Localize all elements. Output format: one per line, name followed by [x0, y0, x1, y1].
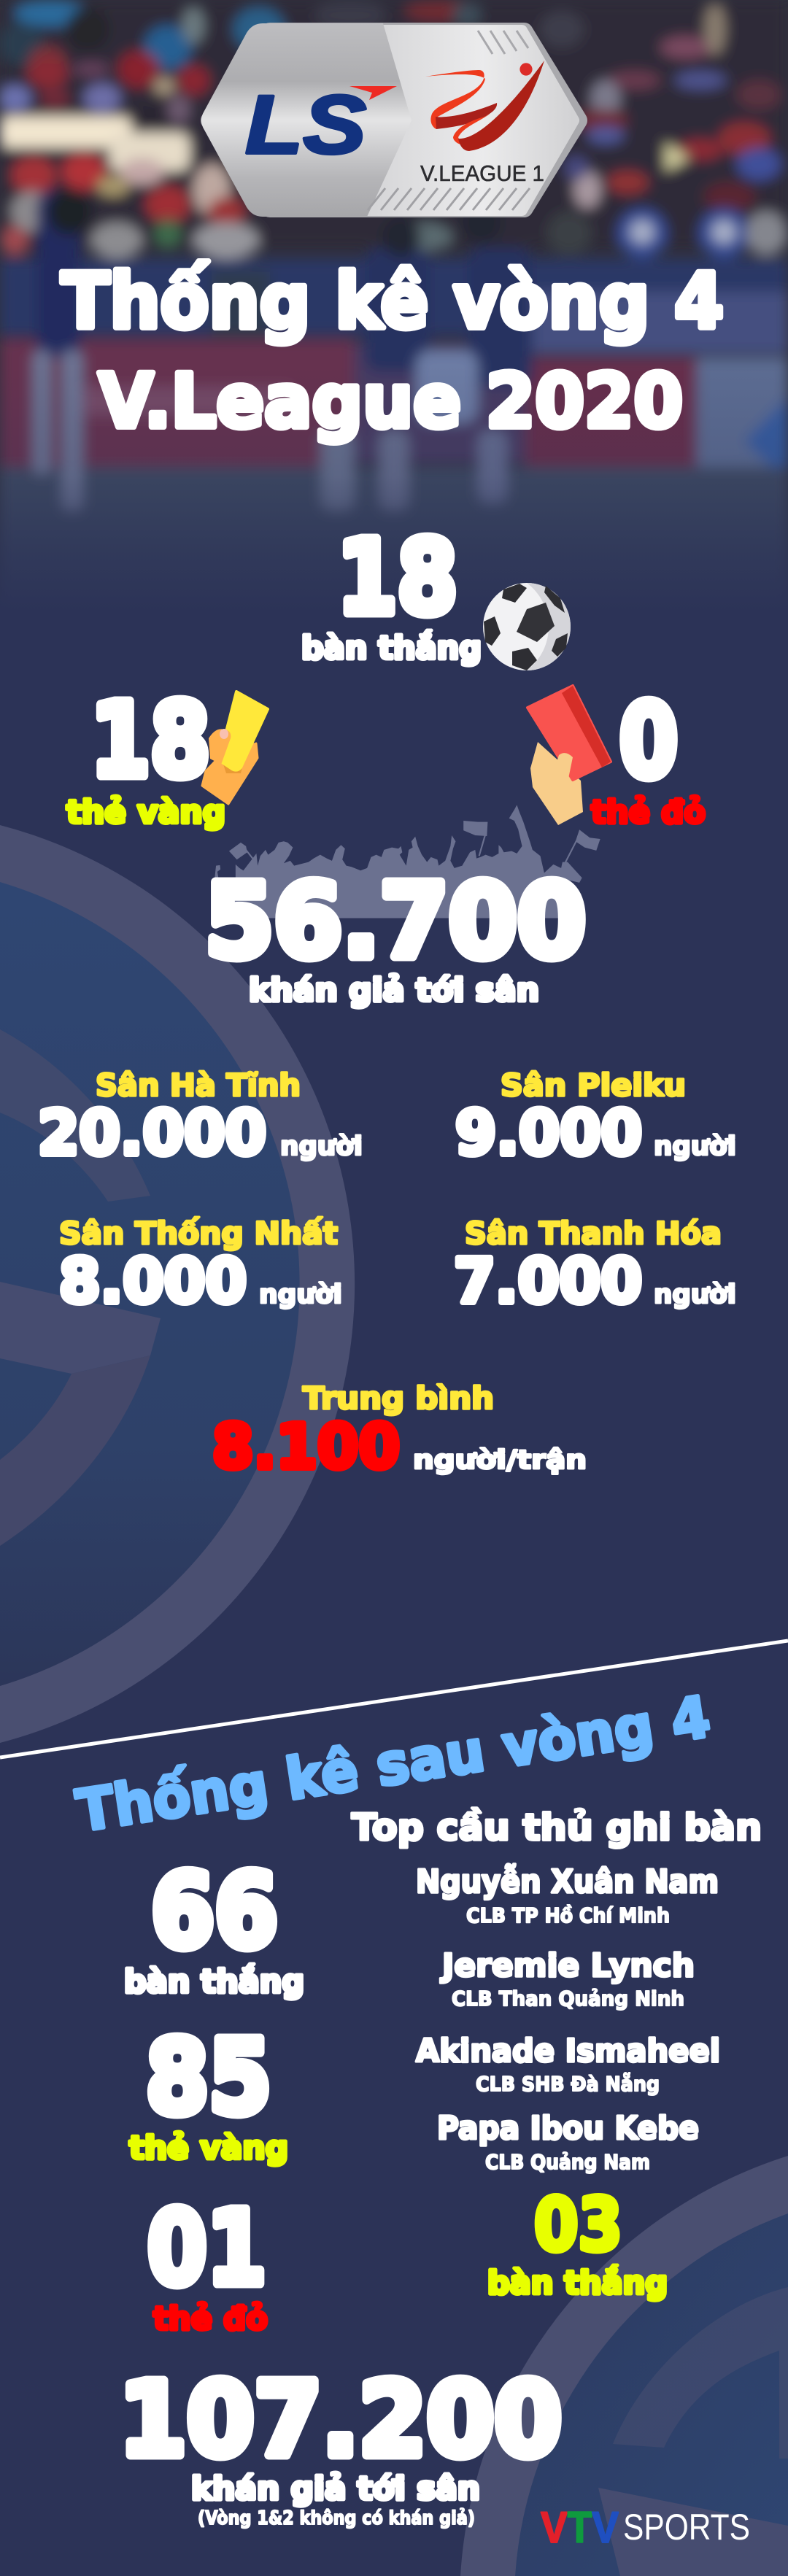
stat: red cards — [591, 682, 706, 831]
player name: Jeremie Lynch — [440, 1947, 695, 1984]
player name: Nguyễn Xuân Nam — [416, 1863, 719, 1900]
logo: VTV Sports — [541, 2503, 750, 2552]
logo mark: VTV: VTV — [541, 2503, 619, 2552]
club: CLB Than Quảng Ninh — [452, 1987, 684, 2011]
logo: V.League 1 label: V.LEAGUE 1 — [420, 160, 544, 186]
stadium name: Sân Pleiku — [501, 1067, 686, 1103]
stadium name: Sân Thanh Hóa — [465, 1215, 722, 1251]
stat: total spectators — [205, 862, 586, 1009]
stat: cumulative yellow cards — [129, 2019, 288, 2167]
stat: cumulative spectators — [119, 2361, 562, 2529]
icon: hand with red card — [528, 686, 611, 825]
player name: Akinade Ismaheel — [416, 2032, 720, 2070]
stadium name: Sân Thống Nhất — [59, 1215, 338, 1251]
background: blurred stadium photo — [0, 0, 788, 613]
logo badge: LS V.League 1 — [201, 23, 578, 217]
club: CLB TP Hồ Chí Minh — [466, 1903, 670, 1927]
icon: small red ball — [519, 63, 533, 76]
label: goals: bàn thắng — [487, 2264, 668, 2302]
background: watermark logo left — [0, 825, 355, 1743]
stat: top scorer goals — [487, 2182, 668, 2302]
unit: người — [654, 1132, 736, 1161]
number: 18 yellow cards: 18 — [90, 681, 210, 800]
icon: V.League ribbon — [425, 61, 544, 151]
number: 66: 66 — [151, 1852, 278, 1971]
background: watermark logo bottom right — [460, 2156, 788, 2576]
scorer: Jeremie Lynch — [440, 1947, 695, 2011]
title line 2: V.League 2020 — [98, 358, 683, 445]
unit: per match: người/trận — [413, 1445, 587, 1475]
label: yellow cards: thẻ vàng — [129, 2130, 288, 2167]
attendance: 20.000 — [38, 1097, 266, 1169]
logo: LS wordmark: LS — [245, 79, 366, 171]
label: red cards: thẻ đỏ — [591, 794, 706, 831]
attendance: 9.000 — [455, 1097, 642, 1169]
number: 107.200: 107.200 — [119, 2361, 562, 2480]
icon: crowd silhouette — [215, 805, 600, 918]
attendance: 7.000 — [454, 1245, 642, 1317]
number: 01: 01 — [147, 2189, 266, 2308]
title line 1: Thống kê vòng 4 — [61, 257, 724, 346]
stadium: Thống Nhất — [59, 1215, 342, 1317]
scorer: Akinade Ismaheel — [416, 2032, 720, 2096]
number: 0 red cards: 0 — [619, 682, 678, 801]
scorer: Nguyễn Xuân Nam — [416, 1863, 719, 1927]
number: 03: 03 — [534, 2182, 622, 2267]
label: goals: bàn thắng — [124, 1963, 304, 2000]
label: spectators: khán giả tới sân — [249, 972, 539, 1009]
club: CLB SHB Đà Nẵng — [476, 2071, 660, 2096]
label: average: Trung bình — [303, 1380, 494, 1416]
heading: stats after round 4: Thống kê sau vòng 4 — [72, 1685, 714, 1845]
number: 85: 85 — [146, 2019, 271, 2138]
logo text: SPORTS: SPORTS — [623, 2507, 750, 2548]
note: rounds without spectators: (Vòng 1&2 không có khán giả) — [198, 2507, 475, 2529]
icon: football — [483, 583, 571, 670]
stadium: Hà Tĩnh — [38, 1067, 363, 1169]
heading: top scorers: Top cầu thủ ghi bàn — [352, 1806, 762, 1849]
icon: logo hatch stripes — [368, 31, 530, 210]
label: red cards: thẻ đỏ — [153, 2300, 268, 2337]
scorer: Papa Ibou Kebe — [437, 2110, 699, 2174]
number: 8.100: 8.100 — [212, 1411, 400, 1482]
icon: hand with yellow card — [202, 692, 268, 804]
stadium: Pleiku — [455, 1067, 736, 1169]
stat: cumulative red cards — [147, 2189, 268, 2337]
background: photo fade into navy — [0, 365, 788, 613]
stadium: Thanh Hóa — [454, 1215, 736, 1317]
unit: người — [654, 1280, 736, 1310]
number: 56.700: 56.700 — [205, 862, 586, 981]
stat: average attendance — [212, 1380, 587, 1482]
club: CLB Quảng Nam — [485, 2150, 650, 2174]
label: goals: bàn thắng — [301, 630, 482, 667]
stat: 18 goals — [301, 519, 482, 667]
player name: Papa Ibou Kebe — [437, 2110, 699, 2147]
stat: cumulative goals — [124, 1852, 304, 2000]
label: yellow cards: thẻ vàng — [66, 794, 225, 831]
icon: LS red arrow — [349, 86, 397, 100]
unit: người — [259, 1280, 342, 1310]
unit: người — [280, 1132, 363, 1161]
label: spectators: khán giả tới sân — [191, 2470, 480, 2507]
stat: yellow cards — [66, 681, 225, 831]
number: 18 goals: 18 — [337, 519, 457, 638]
stadium name: Sân Hà Tĩnh — [96, 1067, 301, 1103]
attendance: 8.000 — [59, 1245, 247, 1317]
